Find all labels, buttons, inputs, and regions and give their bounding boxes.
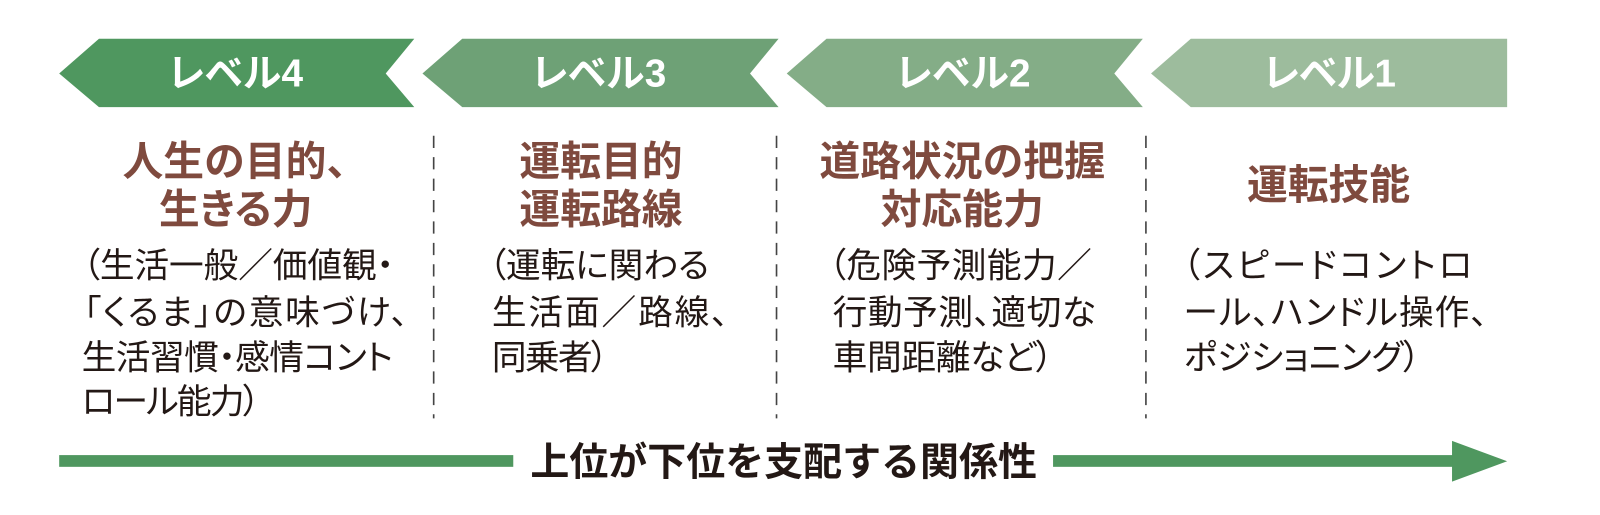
description: level 3 [489, 248, 729, 377]
heading: level 1: 運転技能 [1247, 162, 1410, 208]
banner: level 3 [422, 39, 779, 107]
heading: level 2: 対応能力 [881, 186, 1044, 232]
column: level 3 content [489, 139, 729, 377]
heading: level 3 [519, 139, 683, 232]
heading: level 4: 人生の目的、 [123, 139, 367, 185]
description: level 2 [829, 247, 1096, 377]
banner: level 1 [1151, 39, 1507, 107]
description: level 3: 生活面／路線、 [492, 293, 729, 332]
heading: level 2 [819, 139, 1105, 232]
description: level 2: 行動予測、適切な [833, 293, 1096, 332]
description: level 4 [82, 247, 408, 421]
heading: level 4 [123, 139, 367, 232]
banner: level 3: レベル3 [532, 53, 666, 96]
description: level 4: （生活一般／価値観・ [83, 247, 394, 286]
arrow: hierarchy direction [59, 441, 1507, 482]
heading: level 2: 道路状況の把握 [819, 139, 1105, 185]
description: level 4: 「くるま」の意味づけ、 [84, 293, 408, 332]
column: level 1 content [1183, 162, 1488, 377]
heading: level 3: 運転目的 [519, 139, 683, 185]
description: level 2: （危険予測能力／ [829, 247, 1092, 286]
description: level 3: 同乗者） [492, 339, 608, 377]
arrow label: 上位が下位を支配する関係性 [530, 442, 1037, 485]
description: level 1: ール、ハンドル操作、 [1184, 293, 1488, 332]
description: level 1 [1183, 248, 1488, 377]
description: level 1: ポジショニング） [1184, 338, 1420, 377]
heading: level 3: 運転路線 [519, 186, 683, 232]
banner: level 1: レベル1 [1263, 53, 1396, 96]
banner: level 2 [787, 39, 1143, 107]
heading: level 4: 生きる力 [159, 186, 313, 232]
description: level 2: 車間距離など） [833, 338, 1053, 377]
banner: level 4 [59, 39, 414, 107]
description: level 4: ロール能力） [82, 382, 260, 421]
banner: level 2: レベル2 [896, 53, 1031, 96]
description: level 1: （スピードコントロ [1183, 248, 1472, 286]
banner: level 4: レベル4 [168, 53, 303, 96]
description: level 4: 生活習慣・感情コント [82, 338, 393, 377]
column: level 2 content [819, 139, 1105, 377]
column: level 4 content [82, 139, 408, 421]
description: level 3: （運転に関わる [489, 248, 709, 286]
